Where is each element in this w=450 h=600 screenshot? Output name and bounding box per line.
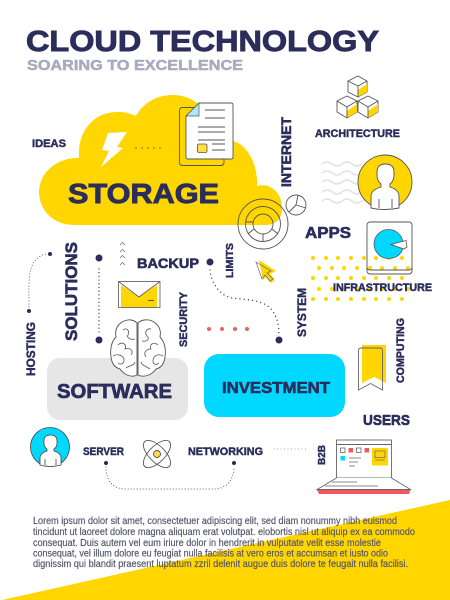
icon: yellow user avatar bbox=[358, 155, 412, 210]
hosting connector bbox=[27, 252, 52, 313]
icon: target rings bbox=[238, 199, 288, 249]
panel: investment bbox=[204, 354, 345, 417]
label: backup: BACKUP bbox=[137, 255, 199, 271]
label: system: SYSTEM bbox=[295, 288, 309, 337]
server networking connector bbox=[104, 461, 236, 489]
icon: cyan user avatar bbox=[30, 428, 70, 466]
yellow dot grid bbox=[311, 256, 410, 301]
label: infrastructure: INFRASTRUCTURE bbox=[333, 282, 432, 294]
body text: dignissim qui blandit praesent luptatum zzril delenit augue duis dolore te feugait nulla facilisi. bbox=[33, 558, 408, 570]
solutions connector bbox=[96, 254, 102, 344]
icon: app panel with pie bbox=[367, 222, 412, 274]
label: hosting: HOSTING bbox=[24, 322, 38, 376]
wavy lines bbox=[322, 162, 370, 203]
label: security: SECURITY bbox=[178, 291, 190, 347]
icon: cubes bbox=[337, 76, 378, 118]
label: computing: COMPUTING bbox=[395, 318, 407, 383]
label: architecture: ARCHITECTURE bbox=[315, 128, 400, 140]
red dots bbox=[207, 327, 249, 331]
cloud: storage bbox=[39, 95, 282, 225]
icon: bookmark bbox=[358, 345, 386, 390]
icon: chevrons bbox=[120, 242, 125, 265]
body text: consequat. Duis autem vel eum iriure dolor in hendrerit in vulputate velit esse molestie bbox=[33, 537, 381, 549]
label: b2b: B2B bbox=[317, 445, 328, 465]
body text: consequat, vel illum dolore eu feugiat nulla facilisis at vero eros et accumsan et iusto odio bbox=[33, 548, 388, 560]
body text bbox=[33, 515, 415, 570]
icon: lightning bolt bbox=[101, 132, 127, 167]
icon: document bbox=[180, 103, 233, 166]
label: limits: LIMITS bbox=[224, 243, 236, 278]
investment label: INVESTMENT bbox=[222, 380, 330, 397]
label: users: USERS bbox=[363, 412, 410, 429]
icon: brain bbox=[111, 320, 165, 376]
panel: software bbox=[47, 358, 188, 420]
label: solutions: SOLUTIONS bbox=[62, 242, 81, 341]
title: CLOUD TECHNOLOGY bbox=[26, 26, 379, 58]
dotted connector bbox=[136, 147, 163, 149]
body text: Lorem ipsum dolor sit amet, consectetuer adipiscing elit, sed diam nonummy nibh euismod bbox=[33, 515, 397, 527]
icon: laptop bbox=[317, 440, 410, 494]
label: server: SERVER bbox=[83, 446, 124, 458]
icon: atom bbox=[139, 436, 175, 472]
software label: SOFTWARE bbox=[57, 381, 172, 403]
label: apps: APPS bbox=[305, 225, 351, 242]
label: ideas: IDEAS bbox=[32, 138, 66, 150]
label: internet: INTERNET bbox=[278, 117, 294, 187]
dotted line to b2b bbox=[274, 448, 308, 450]
icon: cursor bbox=[256, 260, 276, 283]
icon: small pie bbox=[286, 195, 306, 215]
subtitle: SOARING TO EXCELLENCE bbox=[27, 58, 243, 74]
storage label: STORAGE bbox=[68, 178, 219, 209]
label: networking: NETWORKING bbox=[188, 446, 263, 458]
backup connector bbox=[206, 258, 282, 344]
yellow corner shape bbox=[2, 500, 450, 600]
icon: envelope bbox=[118, 282, 160, 308]
